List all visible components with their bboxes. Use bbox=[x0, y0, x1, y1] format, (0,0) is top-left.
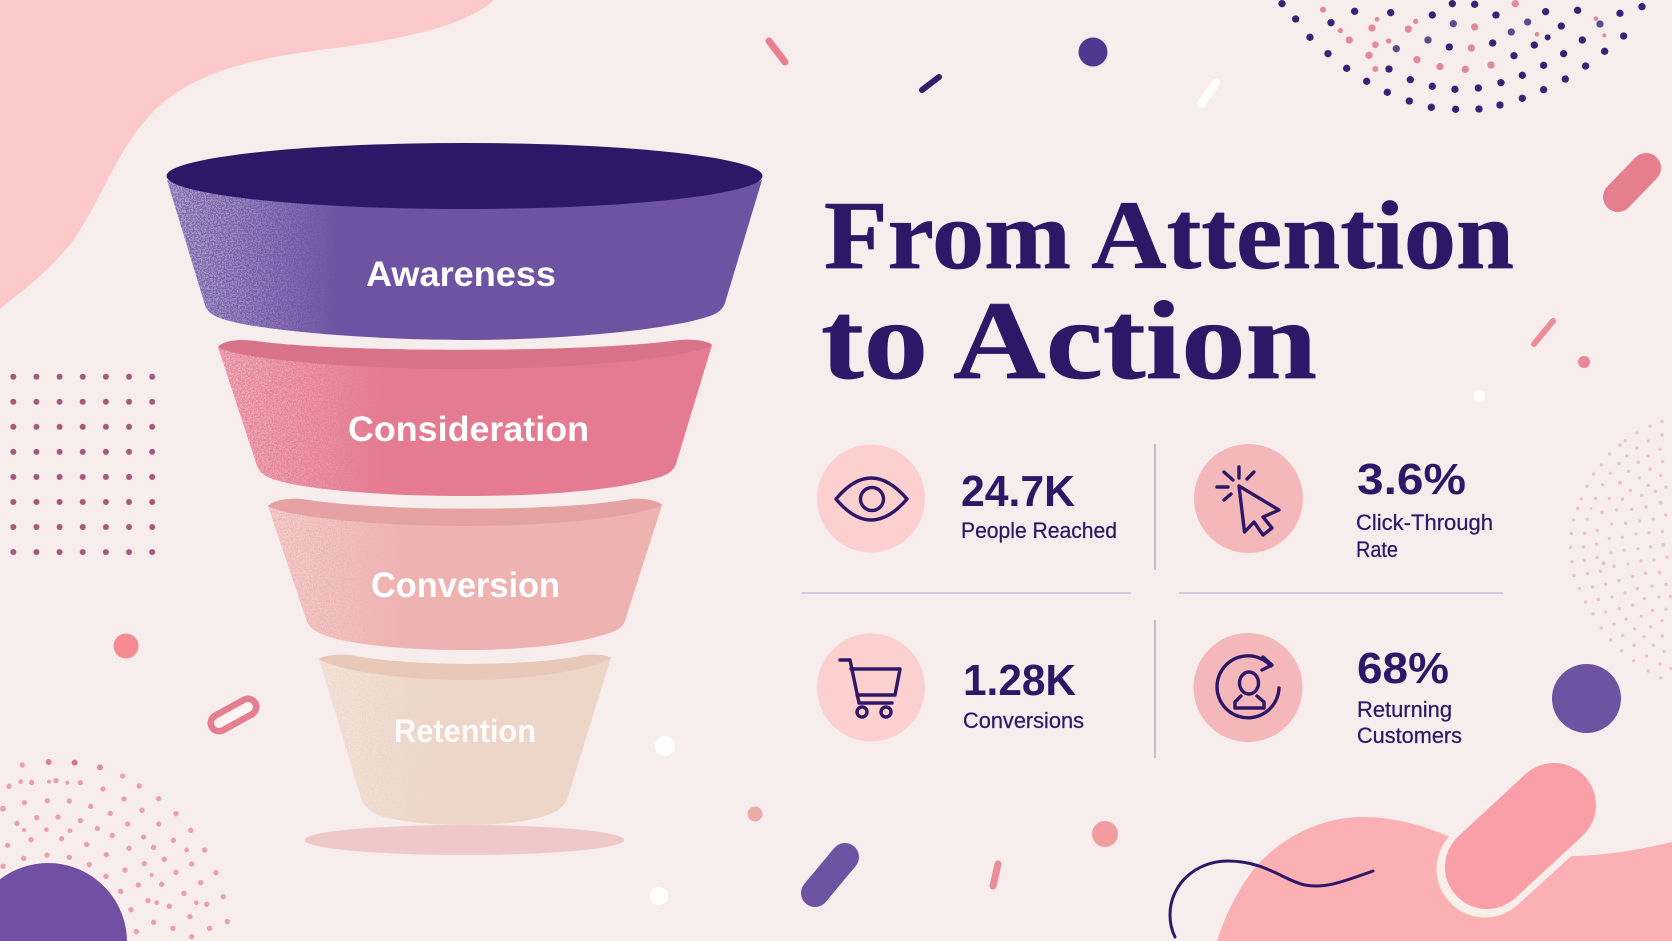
stat: people reached: People Reached bbox=[961, 518, 1117, 543]
title bbox=[821, 182, 1514, 403]
pill: bottom right bbox=[1485, 805, 1554, 869]
curve: bottom right line bbox=[1170, 861, 1373, 937]
funnel segment: conversion bbox=[265, 499, 662, 655]
dots: left grid bbox=[2, 365, 164, 565]
icon: eye bbox=[817, 444, 925, 552]
circle: bottom left purple bbox=[0, 863, 127, 941]
icon: cursor click bbox=[1194, 444, 1303, 553]
funnel segment: consideration bbox=[215, 340, 712, 500]
dots: bottom left bbox=[0, 759, 230, 939]
dots: top right bbox=[1278, 0, 1646, 113]
stat: returning customers: 68% bbox=[1357, 644, 1449, 693]
stat: people reached: 24.7K bbox=[961, 467, 1075, 516]
stat: conversions bbox=[817, 634, 1084, 742]
stat: click-through rate bbox=[1194, 444, 1493, 562]
dots: right faint bbox=[1569, 420, 1672, 680]
dividers bbox=[802, 444, 1503, 758]
stat: returning customers: Customers bbox=[1357, 723, 1462, 748]
funnel base shadow bbox=[304, 825, 624, 855]
stat: returning customers bbox=[1194, 633, 1462, 748]
title: to Action bbox=[821, 279, 1317, 403]
icon: shopping cart bbox=[817, 634, 925, 742]
funnel segment: retention: Retention bbox=[394, 713, 536, 749]
stat: click-through rate: 3.6% bbox=[1357, 455, 1466, 504]
icon: returning customer bbox=[1194, 633, 1302, 742]
blob: top left bbox=[0, 0, 494, 309]
funnel segment: consideration: Consideration bbox=[348, 410, 589, 449]
stat: returning customers: Returning bbox=[1357, 697, 1452, 722]
blob: bottom right bbox=[1217, 817, 1672, 941]
stat: click-through rate: Click-Through bbox=[1356, 510, 1493, 535]
title: From Attention bbox=[824, 182, 1514, 289]
circle: right purple bbox=[1552, 664, 1621, 733]
funnel segment: retention bbox=[316, 655, 611, 830]
stat: people reached bbox=[817, 444, 1117, 552]
funnel segment: awareness bbox=[165, 143, 762, 345]
funnel bbox=[165, 143, 762, 855]
funnel segment: awareness: Awareness bbox=[366, 255, 556, 294]
funnel segment: conversion: Conversion bbox=[371, 566, 560, 605]
stat: conversions: 1.28K bbox=[963, 656, 1076, 705]
stat: conversions: Conversions bbox=[963, 708, 1084, 733]
stat: click-through rate: Rate bbox=[1356, 537, 1398, 562]
